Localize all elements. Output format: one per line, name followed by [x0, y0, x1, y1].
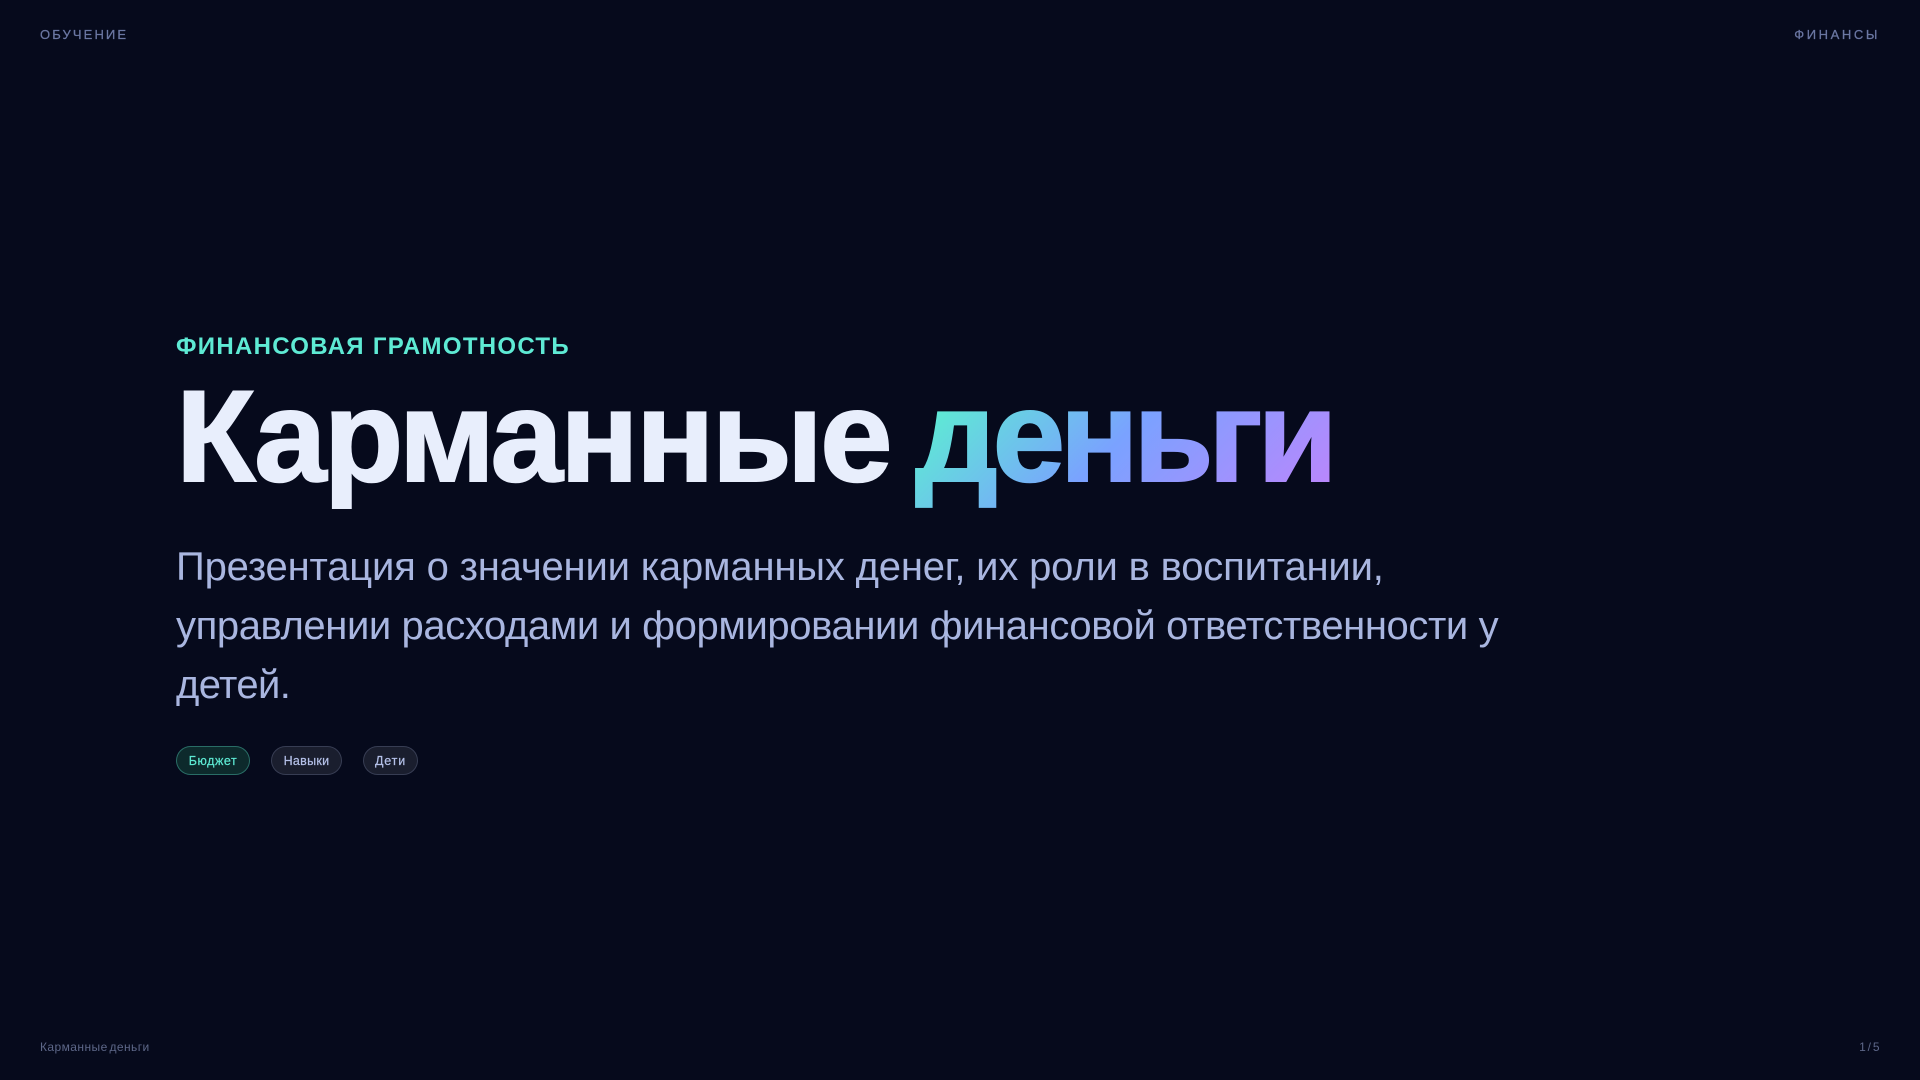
- eyebrow heading: ФИНАНСОВАЯ ГРАМОТНОСТЬ: [176, 333, 570, 360]
- subtitle text block: [176, 545, 1498, 707]
- subtitle text block: управлении расходами и формировании финансовой ответственности у: [176, 604, 1498, 648]
- top right label: ФИНАНСЫ: [1794, 27, 1880, 42]
- top left label: ОБУЧЕНИЕ: [40, 27, 128, 42]
- title: Карманные деньги: [176, 363, 1332, 509]
- tag: Дети: Дети: [375, 754, 406, 768]
- tag: Дети: [363, 746, 418, 775]
- subtitle text block: Презентация о значении карманных денег, их роли в воспитании,: [176, 545, 1384, 589]
- tag: Навыки: [271, 746, 342, 775]
- footer page number: 1 / 5: [1859, 1040, 1880, 1054]
- tag: Навыки: Навыки: [284, 754, 329, 768]
- subtitle text block: детей.: [176, 663, 290, 707]
- tag: Бюджет: Бюджет: [189, 754, 237, 768]
- footer left text: Карманные деньги: [40, 1040, 150, 1054]
- tag: Бюджет: [176, 746, 250, 775]
